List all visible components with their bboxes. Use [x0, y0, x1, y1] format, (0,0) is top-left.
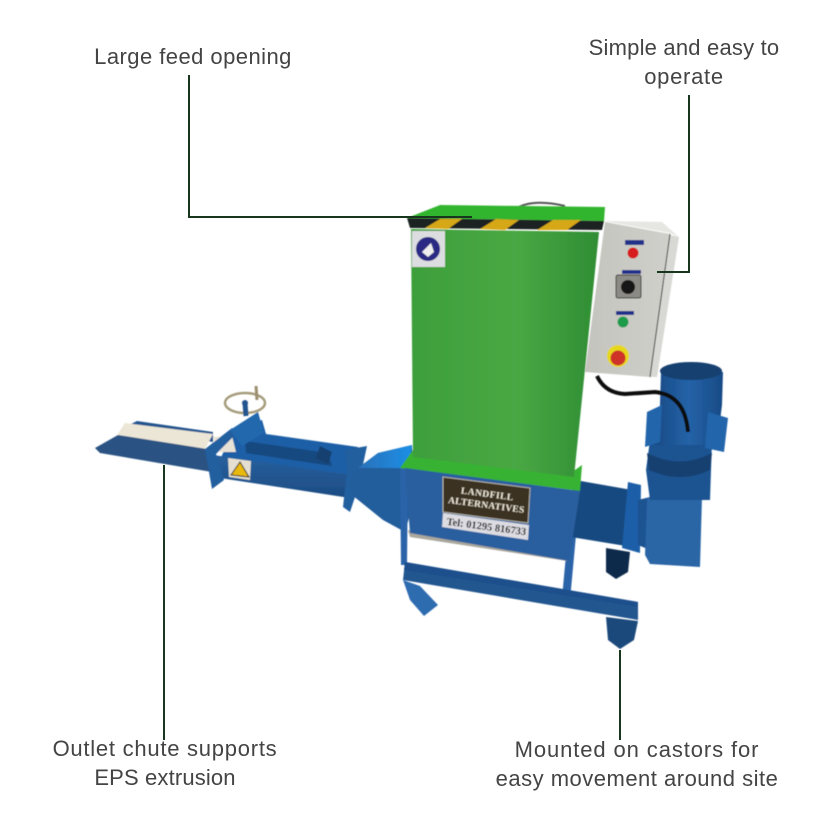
label: castors: easy movement around site	[496, 766, 778, 791]
drive housing	[565, 480, 632, 547]
machine: EPS compactor	[95, 203, 728, 649]
hand wheel	[225, 386, 265, 446]
leader line: castors	[619, 650, 621, 740]
outlet chute	[95, 386, 367, 512]
rear arc	[514, 203, 565, 210]
hopper body	[411, 229, 599, 477]
power cable	[597, 376, 688, 432]
label: castors: Mounted on castors for	[515, 737, 759, 762]
power indicator	[625, 240, 644, 258]
EPS extrusion foam	[117, 423, 213, 449]
label: outlet chute: EPS extrusion	[94, 765, 236, 790]
leader line: outlet chute	[163, 465, 165, 740]
leader line: easy to operate	[657, 95, 689, 272]
run indicator	[616, 311, 634, 328]
mask safety sign	[412, 231, 445, 267]
company sign: ALTERNATIVES	[447, 496, 525, 516]
castors	[403, 548, 638, 649]
feed opening lip	[407, 205, 605, 221]
hazard stripe band	[407, 218, 604, 230]
gearbox	[645, 497, 702, 567]
hopper base plate	[400, 450, 582, 491]
label: simple and easy to operate: operate	[644, 64, 724, 89]
warning label	[228, 458, 251, 480]
label: large feed opening: Large feed opening	[94, 44, 292, 69]
company sign	[442, 477, 530, 540]
electric motor	[645, 362, 728, 500]
emergency stop	[607, 345, 629, 367]
funnel	[350, 445, 414, 532]
base rail and legs	[400, 468, 638, 620]
leader line: feed opening	[189, 75, 472, 217]
label: simple and easy to operate: Simple and easy to	[589, 35, 779, 60]
hopper	[400, 203, 605, 561]
label: outlet chute: Outlet chute supports	[53, 736, 277, 761]
company sign: LANDFILL	[460, 487, 514, 503]
company sign: Tel: 01295 816733	[446, 517, 527, 538]
selector switch	[616, 270, 641, 298]
control box	[585, 221, 679, 377]
